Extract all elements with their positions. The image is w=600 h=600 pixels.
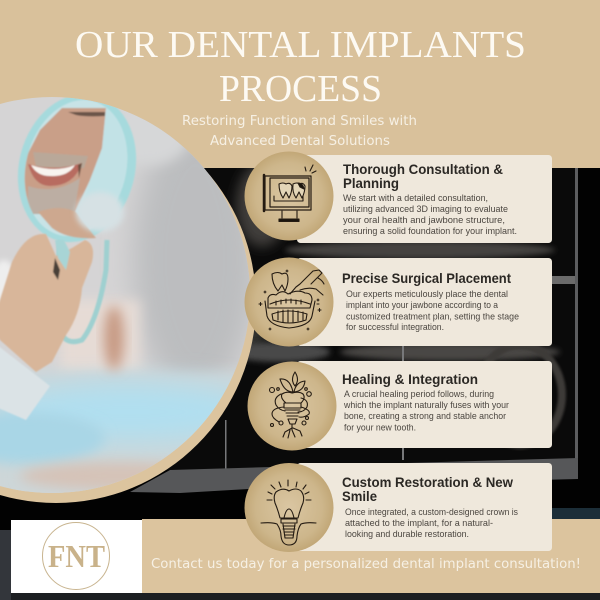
step 1 heading: Thorough Consultation & — [343, 161, 503, 177]
title: OUR DENTAL IMPLANTS — [75, 24, 526, 66]
step 4 heading: Custom Restoration & New — [342, 474, 513, 490]
mirror — [17, 98, 137, 345]
step 1 description: utilizing advanced 3D imaging to evaluate — [343, 204, 508, 215]
logo box — [11, 520, 142, 593]
subtitle: Restoring Function and Smiles with — [182, 114, 417, 129]
icon: jaw, tooth and dental tool — [259, 270, 324, 330]
logo box: FNT — [48, 538, 105, 574]
step 2 description: Our experts meticulously place the dental — [346, 289, 508, 300]
step 3 description — [343, 389, 509, 434]
icon: implant root with leaves — [270, 372, 311, 438]
step 4 description: Once integrated, a custom-designed crown is — [345, 507, 518, 518]
step 4 description — [345, 507, 518, 540]
title: PROCESS — [219, 68, 382, 110]
step 4 description: attached to the implant, for a natural- — [345, 518, 493, 529]
step 4 heading: Smile — [342, 488, 377, 504]
step 4 card — [297, 463, 552, 551]
step 4 heading — [342, 474, 513, 504]
icon: monitor with teeth scan — [264, 165, 316, 222]
hand — [0, 234, 93, 420]
step 2 description — [346, 289, 519, 333]
step 1 description: your oral health and jawbone structure, — [343, 215, 505, 226]
panel: step 3 healing — [248, 361, 552, 450]
photo: patient smiling in a hand mirror — [0, 97, 254, 503]
bottom contact band — [142, 519, 600, 593]
step 2 description: implant into your jawbone according to a — [346, 300, 499, 311]
step 3 badge — [248, 362, 336, 450]
step 3 description: bone, creating a strong and stable anchor — [344, 411, 506, 422]
step 1 heading — [343, 161, 503, 191]
step 2 heading: Precise Surgical Placement — [342, 270, 511, 286]
step 1 heading: Planning — [343, 175, 399, 191]
step 4 badge — [244, 463, 334, 552]
title — [75, 24, 526, 110]
step 2 badge — [244, 258, 334, 346]
step 4 description: looking and durable restoration. — [345, 529, 469, 540]
step 3 description: for your new tooth. — [344, 422, 416, 434]
step 1 description — [343, 193, 517, 237]
step 2 card — [297, 258, 552, 346]
step 2 description: for successful integration. — [346, 322, 444, 333]
step 3 card — [297, 361, 552, 448]
step 1 description: We start with a detailed consultation, — [343, 193, 488, 204]
top tan header band — [0, 0, 600, 168]
panel: step 4 restoration — [244, 463, 552, 552]
step 1 description: ensuring a solid foundation for your implant. — [343, 226, 517, 237]
icon: implant crown — [261, 480, 316, 545]
step 2 description: customized treatment plan, setting the stage — [346, 312, 519, 322]
step 3 description: which the implant naturally fuses with your — [343, 400, 509, 411]
subtitle: Advanced Dental Solutions — [210, 134, 390, 149]
panel: step 1 consultation — [244, 152, 552, 243]
subtitle — [182, 114, 417, 149]
contact text: Contact us today for a personalized dental implant consultation! — [151, 557, 581, 572]
step 1 card — [297, 155, 552, 243]
step 1 badge — [244, 152, 334, 240]
step 3 heading: Healing & Integration — [342, 371, 478, 387]
panel: step 2 surgical placement — [244, 258, 552, 346]
step 3 description: A crucial healing period follows, during — [344, 389, 494, 400]
